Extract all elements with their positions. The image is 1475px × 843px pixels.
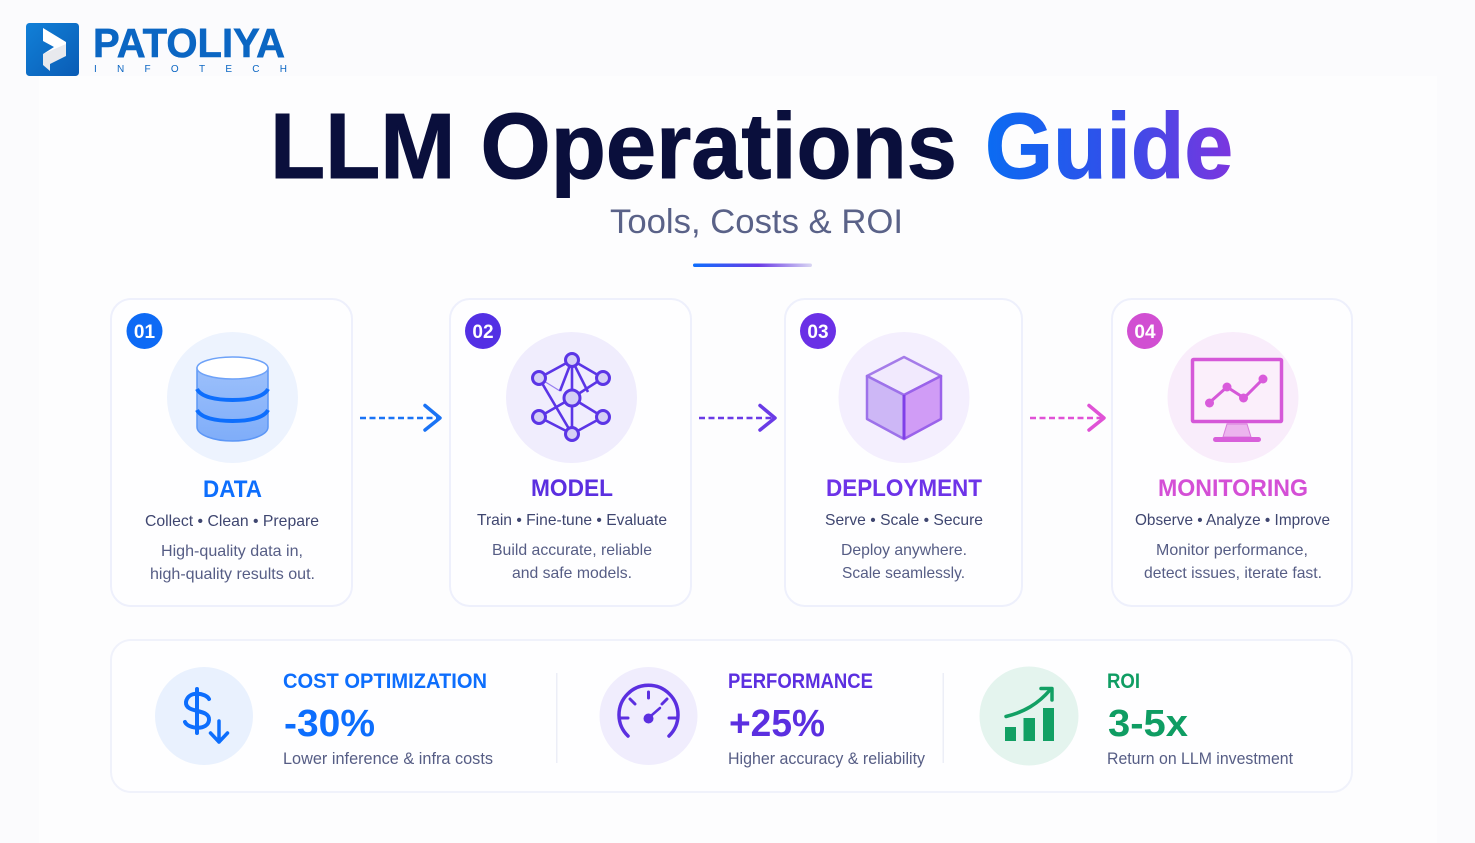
tagline: Serve • Scale • Secure	[825, 512, 983, 529]
title: LLM Operations	[270, 94, 957, 198]
badge 03: 03	[807, 322, 829, 343]
description	[150, 543, 315, 583]
description	[1144, 542, 1322, 582]
description: detect issues, iterate fast.	[1144, 565, 1322, 582]
panel: step 02 model	[450, 299, 691, 606]
value: 3-5x	[1108, 703, 1188, 745]
metric: performance	[600, 667, 926, 768]
label: ROI	[1107, 670, 1140, 693]
icon: dollar with down arrow	[155, 667, 253, 765]
icon: monitor with line chart	[1168, 332, 1298, 463]
badge 02: 02	[472, 322, 494, 343]
description	[492, 542, 652, 582]
panel: key metrics	[111, 640, 1352, 792]
icon: cube	[838, 332, 970, 463]
badge 01: 01	[134, 322, 155, 343]
description	[841, 542, 967, 582]
arrow: data to model	[360, 406, 440, 430]
icon: rising bar chart	[980, 666, 1078, 766]
metric: ROI	[980, 666, 1293, 768]
heading: data: DATA	[203, 476, 262, 503]
badge 02	[465, 313, 501, 349]
logo: Patoliya Infotech	[26, 20, 287, 76]
tagline: Observe • Analyze • Improve	[1135, 512, 1330, 529]
description: high-quality results out.	[150, 566, 315, 583]
subtitle: Tools, Costs & ROI	[610, 203, 903, 241]
logo: Patoliya Infotech: PATOLIYA	[93, 20, 285, 66]
value: +25%	[729, 703, 825, 745]
heading: monitoring: MONITORING	[1158, 475, 1308, 502]
label: PERFORMANCE	[728, 670, 873, 693]
badge 01	[126, 313, 162, 349]
description: Deploy anywhere.	[841, 542, 967, 559]
caption: Return on LLM investment	[1107, 750, 1293, 768]
heading: model: MODEL	[531, 475, 613, 502]
description: Build accurate, reliable	[492, 542, 652, 559]
badge 04	[1127, 313, 1163, 349]
panel: step 04 monitoring	[1112, 299, 1352, 606]
description: and safe models.	[512, 565, 632, 582]
arrow: model to deployment	[699, 406, 775, 430]
logo: Patoliya Infotech: INFOTECH	[94, 64, 287, 75]
caption: Lower inference & infra costs	[283, 750, 493, 768]
icon: gauge	[600, 667, 698, 765]
panel: step 03 deployment	[785, 299, 1022, 606]
description: Scale seamlessly.	[842, 565, 965, 582]
description: High-quality data in,	[161, 543, 303, 560]
panel: step 01 data	[111, 299, 352, 606]
title underline	[693, 264, 812, 267]
badge 03	[800, 313, 836, 349]
tagline: Train • Fine-tune • Evaluate	[477, 512, 667, 529]
tagline: Collect • Clean • Prepare	[145, 513, 319, 530]
value: -30%	[284, 703, 375, 745]
title: Guide	[985, 94, 1233, 198]
label: COST OPTIMIZATION	[283, 670, 487, 693]
arrow: deployment to monitoring	[1030, 406, 1104, 430]
icon: database	[167, 332, 298, 463]
badge 04: 04	[1134, 322, 1156, 343]
metric: cost optimization	[155, 667, 493, 768]
description: Monitor performance,	[1156, 542, 1308, 559]
caption: Higher accuracy & reliability	[728, 750, 926, 768]
heading: deployment: DEPLOYMENT	[826, 475, 982, 502]
icon: neural network	[506, 332, 637, 463]
